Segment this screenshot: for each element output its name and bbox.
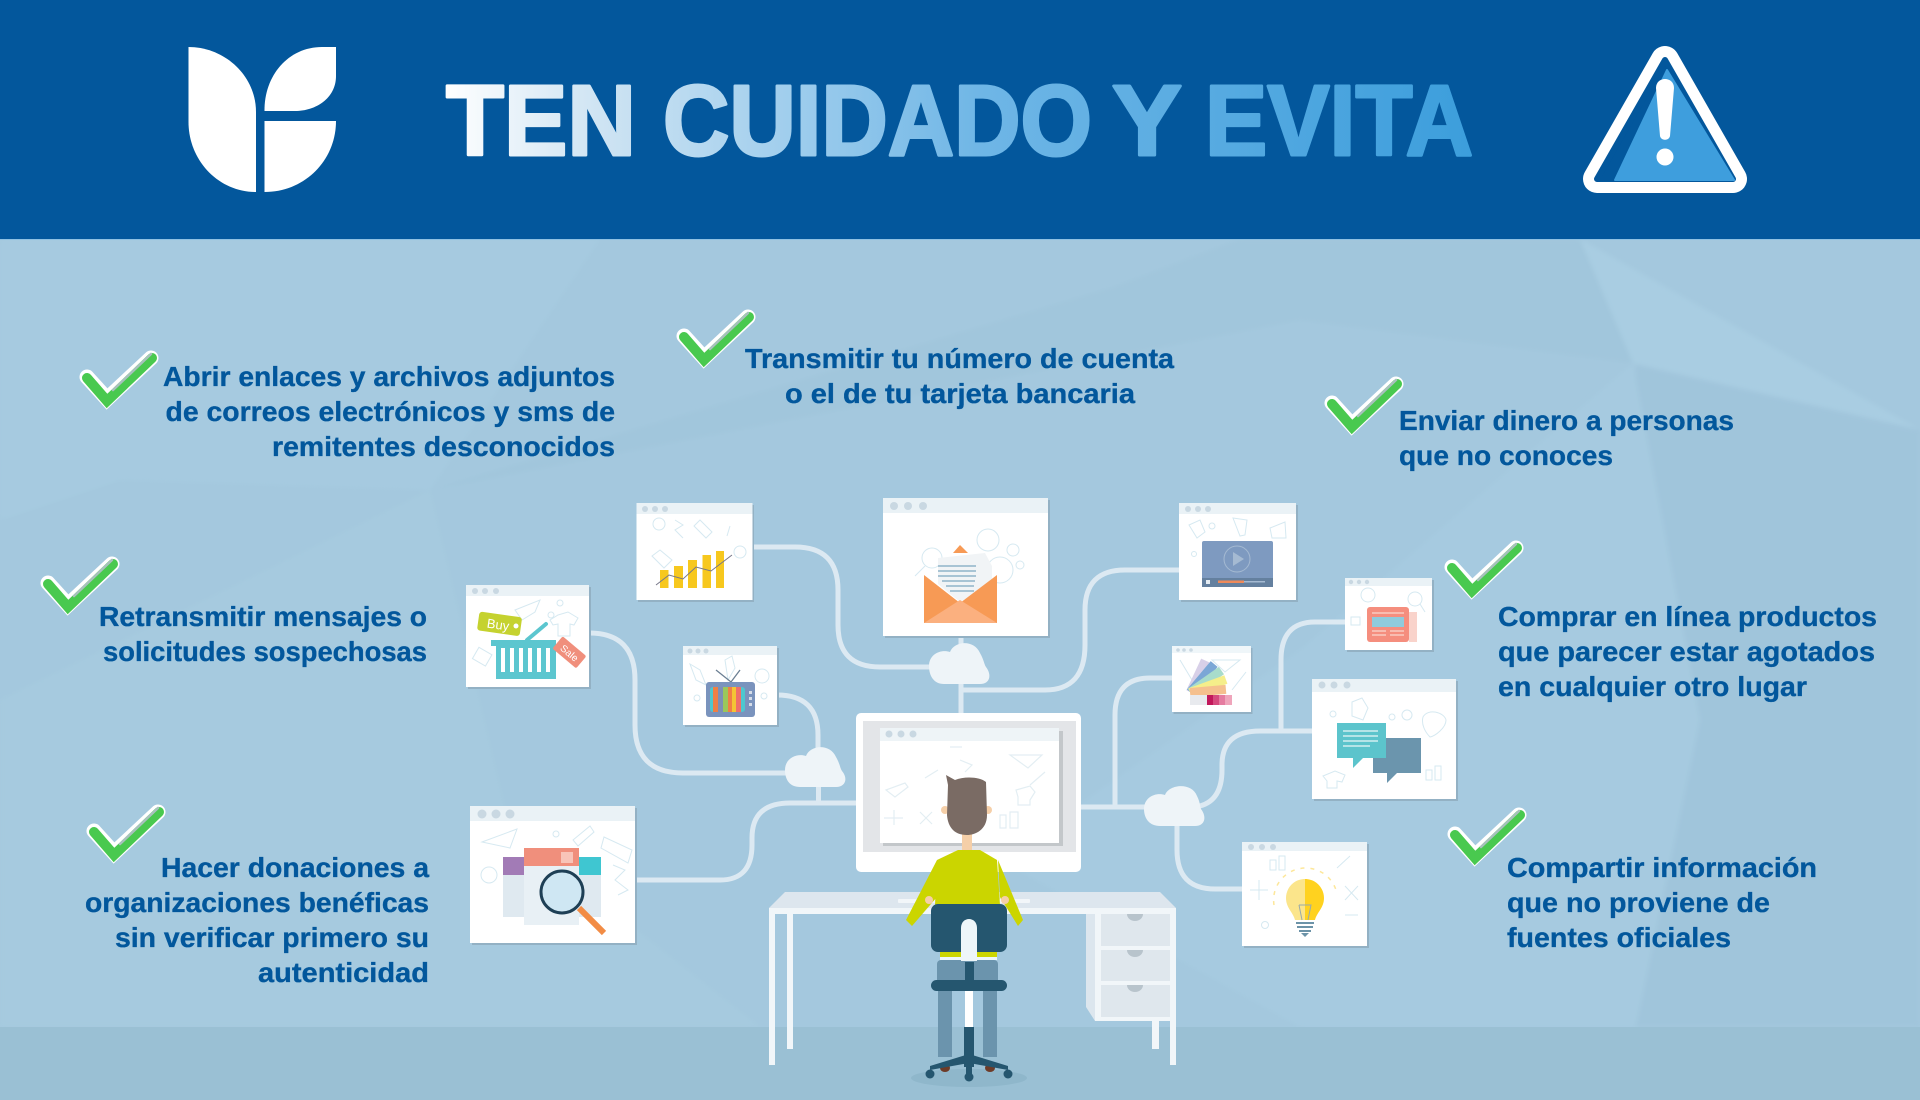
item: hacer donaciones: Hacer donaciones a: [161, 852, 429, 883]
item: compartir informacion: fuentes oficiales: [1507, 922, 1731, 953]
item: transmitir numero: Transmitir tu número de cuenta: [745, 343, 1174, 374]
window: email: [883, 498, 1050, 638]
item: compartir informacion: [1455, 811, 1817, 953]
item: retransmitir: solicitudes sospechosas: [103, 636, 427, 667]
window: colour palette: [1172, 646, 1252, 714]
item: abrir enlaces: Abrir enlaces y archivos adjuntos: [163, 361, 615, 392]
window: search magnifier: [470, 806, 637, 945]
item: hacer donaciones: sin verificar primero su: [115, 922, 429, 953]
window: shopping basket: Buy: [486, 616, 511, 634]
item: abrir enlaces: remitentes desconocidos: [272, 431, 615, 462]
item: enviar dinero: que no conoces: [1399, 440, 1613, 471]
connector lines: [589, 547, 1345, 889]
item: retransmitir: Retransmitir mensajes o: [99, 601, 427, 632]
item: enviar dinero: Enviar dinero a personas: [1399, 405, 1734, 436]
icon: warning triangle: [1597, 60, 1734, 180]
item: hacer donaciones: autenticidad: [258, 957, 429, 988]
cloud: left: [785, 747, 845, 787]
monitor: [856, 713, 1081, 872]
item: comprar en linea: Comprar en línea productos: [1498, 601, 1877, 632]
item: transmitir numero: [684, 313, 1174, 409]
title: CUIDADO: [663, 65, 1092, 177]
window: chat: [1312, 679, 1458, 801]
desk: [769, 892, 1176, 1065]
title: [446, 65, 1473, 177]
logo: [188, 47, 336, 192]
item: comprar en linea: que parecer estar agotados: [1498, 636, 1875, 667]
cloud: right: [1144, 786, 1204, 826]
window: chart: [636, 503, 754, 602]
window: television: [683, 646, 779, 727]
window: newspaper: [1345, 578, 1434, 652]
item: compartir informacion: Compartir información: [1507, 852, 1817, 883]
item: abrir enlaces: [87, 354, 615, 462]
item: transmitir numero: o el de tu tarjeta bancaria: [785, 378, 1135, 409]
item: comprar en linea: [1452, 544, 1877, 702]
title: TEN: [446, 65, 636, 177]
item: compartir informacion: que no proviene de: [1507, 887, 1770, 918]
title: EVITA: [1205, 65, 1473, 177]
item: hacer donaciones: organizaciones benéficas: [85, 887, 429, 918]
item: comprar en linea: en cualquier otro lugar: [1498, 671, 1807, 702]
item: enviar dinero: [1332, 380, 1734, 471]
title: Y: [1112, 65, 1182, 177]
header band: [0, 0, 1920, 240]
person at desk: [898, 775, 1030, 1087]
item: hacer donaciones: [85, 808, 429, 988]
window: shopping basket: [466, 585, 591, 689]
background: [0, 239, 1920, 1100]
window: video: [1179, 503, 1298, 602]
window: light bulb: [1242, 842, 1369, 948]
item: retransmitir: [48, 560, 427, 667]
cloud: top: [929, 643, 989, 684]
item: abrir enlaces: de correos electrónicos y sms de: [166, 396, 615, 427]
window: shopping basket: Sale: [558, 643, 580, 665]
